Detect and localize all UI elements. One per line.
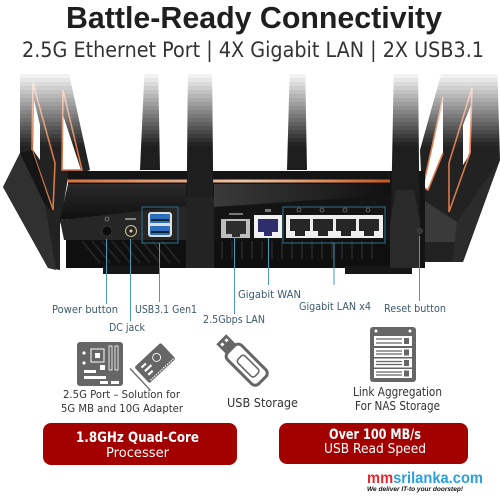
caption: 2.5G port: 5G MB and 10G Adapter [61, 402, 183, 415]
logo: mmsrilanka.com: We deliver IT-to your doorstep! [367, 486, 464, 493]
WAN port [254, 209, 282, 238]
callout: Reset button [384, 236, 446, 315]
callout: 2.5Gbps LAN [203, 237, 265, 326]
caption: link aggregation: Link Aggregation [353, 385, 442, 399]
fade to white over antenna tips [0, 56, 500, 146]
caption: link aggregation: For NAS Storage [355, 399, 440, 413]
right rear antenna [287, 60, 307, 170]
caption: link aggregation [353, 385, 442, 413]
callout: USB: USB3.1 Gen1 [135, 303, 197, 316]
callout: 2.5Gbps LAN: 2.5Gbps LAN [203, 313, 265, 326]
highlight box: LAN [283, 207, 385, 243]
router illustration [0, 56, 500, 274]
callout: Reset button: Reset button [384, 302, 446, 315]
2.5G port [221, 213, 250, 238]
panel: processor [43, 423, 237, 465]
callout: Gigabit LAN x4: Gigabit LAN x4 [299, 300, 371, 313]
vent slats [82, 241, 372, 263]
caption: 2.5G port [61, 388, 183, 415]
orange stripe [68, 180, 390, 182]
router body [60, 171, 425, 274]
callout: DC jack [109, 239, 146, 334]
highlight box: USB [142, 207, 178, 243]
title: Battle-Ready Connectivity [66, 0, 443, 35]
icon: NAS server [370, 327, 416, 382]
right fin antenna [420, 60, 500, 262]
centre antenna left [186, 60, 214, 268]
centre antenna right [390, 60, 420, 268]
panel: processor: 1.8GHz Quad-Core [76, 430, 199, 446]
usb ports [148, 212, 172, 237]
left fin antenna [3, 60, 90, 270]
callout: power button: Power button [52, 303, 118, 316]
callout: Gigabit WAN [238, 238, 301, 301]
callout: Gigabit LAN x4 [299, 243, 371, 313]
caption: 2.5G port: 2.5G Port – Solution for [63, 388, 180, 401]
LAN ports [286, 208, 383, 238]
callout: DC jack: DC jack [109, 321, 146, 334]
dc jack [125, 218, 136, 236]
logo: mmsrilanka.com: mmsrilanka.com [367, 470, 483, 487]
icon: USB drive [214, 332, 269, 387]
left rear antenna [140, 60, 160, 170]
panel: USB read speed [279, 423, 468, 464]
icon: network adapter card [130, 341, 180, 390]
callout: USB [135, 243, 197, 316]
panel: USB read speed: USB Read Speed [324, 441, 426, 457]
icon: motherboard [77, 342, 123, 386]
panel: processor: Processer [106, 445, 169, 461]
reset button [417, 228, 423, 234]
panel: USB read speed: Over 100 MB/s [329, 427, 421, 443]
callout: power button [52, 239, 118, 316]
caption: USB storage: USB Storage [227, 395, 298, 410]
power button [102, 217, 112, 236]
rubber feet [103, 266, 160, 274]
callout: Gigabit WAN: Gigabit WAN [238, 288, 301, 301]
